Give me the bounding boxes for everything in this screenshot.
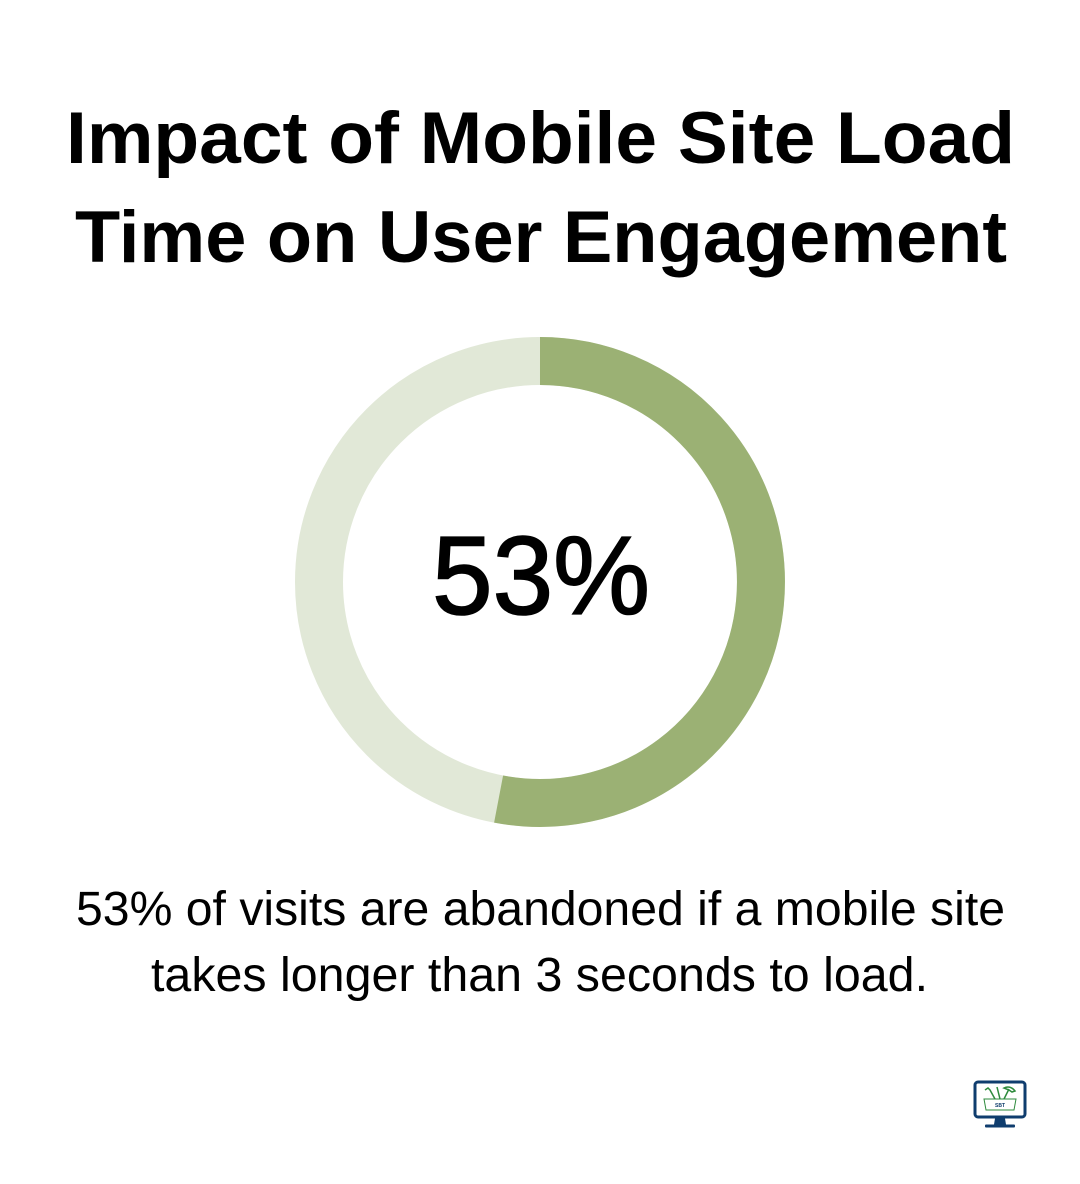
description text: 53% of visits are abandoned if a mobile site: [76, 883, 1005, 936]
description text: [76, 883, 1005, 1002]
title: Time on User Engagement: [75, 197, 1007, 278]
icon: SBT monitor logo: [975, 1082, 1025, 1128]
title: Impact of Mobile Site Load: [66, 98, 1015, 179]
title: [66, 98, 1015, 278]
donut chart: 53%: [319, 361, 761, 803]
icon: SBT monitor logo: SBT: [995, 1103, 1005, 1109]
description text: takes longer than 3 seconds to load.: [151, 949, 928, 1002]
center value: 53%: [432, 514, 650, 638]
